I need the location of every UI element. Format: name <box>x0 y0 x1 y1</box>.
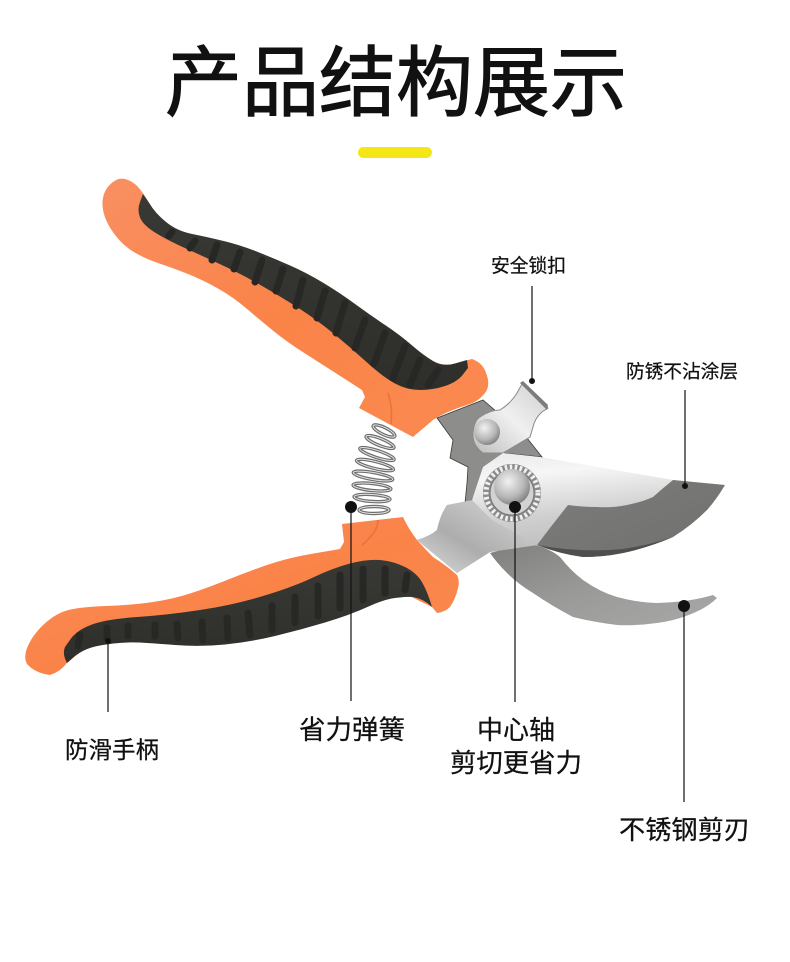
callout: rust resistant coating: 防锈不沾涂层 <box>626 361 738 382</box>
lower grip ribs <box>78 569 407 646</box>
yellow accent bar <box>358 147 432 158</box>
callout: safety latch: 安全锁扣 <box>491 255 566 276</box>
safety latch <box>473 381 548 453</box>
callout: centre shaft: 中心轴 <box>477 715 555 745</box>
callout: centre shaft: 剪切更省力 <box>450 748 582 778</box>
callout: non-slip handle <box>65 638 159 763</box>
pruning shears <box>25 179 725 675</box>
back plate of the lower blade <box>437 400 542 503</box>
upper grip ribs <box>169 232 438 385</box>
blade bevel <box>537 480 725 557</box>
spring <box>353 423 396 514</box>
callout: non-slip handle: 防滑手柄 <box>65 737 159 763</box>
callout: stainless steel blade <box>619 600 750 845</box>
tang of the centre plate <box>417 500 537 573</box>
lower handle <box>25 517 459 675</box>
lower blade <box>490 543 717 625</box>
callout: rust resistant coating <box>626 361 738 489</box>
upper handle <box>102 179 488 437</box>
upper blade and centre plate <box>417 453 725 573</box>
title: 产品结构展示 <box>165 41 627 127</box>
callout: spring <box>299 501 405 745</box>
pivot bolt <box>483 464 541 522</box>
callout: stainless steel blade: 不锈钢剪刃 <box>619 815 750 845</box>
callout: centre shaft <box>450 501 582 778</box>
callout: spring: 省力弹簧 <box>299 715 405 745</box>
callout: safety latch <box>491 255 566 384</box>
